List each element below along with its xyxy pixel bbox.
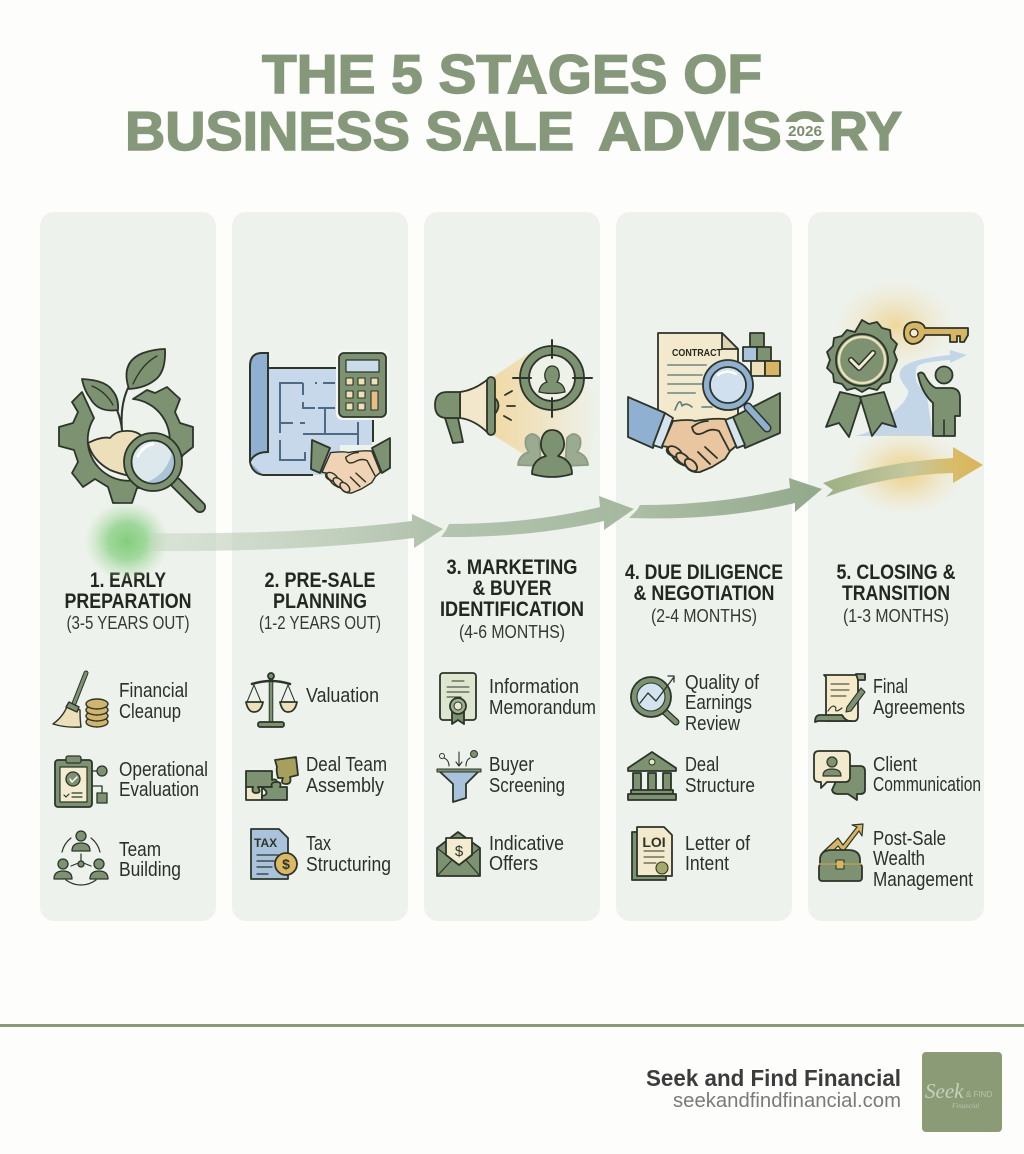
item: team building: Team — [119, 839, 161, 861]
item: final agreements: Agreements — [873, 697, 965, 719]
stage 5 heading: 5. CLOSING & — [836, 561, 956, 584]
icon: contract, blocks, magnifier and handshake — [628, 333, 780, 473]
item: quality of earnings review: Review — [685, 713, 740, 735]
item: letter of intent: Intent — [685, 853, 729, 875]
item: indicative offers — [489, 833, 564, 875]
title: RY — [829, 100, 902, 162]
icon: team building — [54, 831, 108, 885]
item: post-sale wealth management: Post-Sale — [873, 828, 946, 850]
glow: behind closing icons — [835, 280, 955, 370]
item: financial cleanup: Cleanup — [119, 701, 181, 723]
item: quality of earnings review — [685, 672, 759, 735]
stage 2 heading — [259, 569, 381, 633]
icon: treasure chest with growth arrow — [819, 824, 863, 881]
stage 3 heading: & BUYER — [472, 577, 552, 600]
icon: letter of intent: LOI — [642, 834, 666, 850]
item: quality of earnings review: Quality of — [685, 672, 759, 694]
stage 4 heading: 4. DUE DILIGENCE — [625, 561, 783, 584]
stage 5 heading: (1-3 MONTHS) — [843, 605, 949, 626]
stage 1 heading: (3-5 YEARS OUT) — [66, 612, 190, 633]
item: post-sale wealth management: Management — [873, 869, 973, 891]
item: buyer screening: Buyer — [489, 754, 534, 776]
footer: company name and website: Seek and Find Financial — [646, 1065, 901, 1091]
title: O — [782, 100, 828, 162]
item: financial cleanup: Financial — [119, 680, 188, 702]
icon: clipboard evaluation — [55, 756, 107, 807]
icon: blueprint, calculator and handshake — [250, 350, 390, 494]
stage 1 heading: 1. EARLY — [90, 569, 166, 592]
icon: tax document and coin: TAX — [254, 836, 277, 850]
icon: contract, blocks, magnifier and handshake: CONTRACT — [672, 348, 722, 359]
item: operational evaluation: Evaluation — [119, 779, 199, 801]
icon: tax document and coin — [251, 829, 297, 879]
handshake — [322, 451, 380, 494]
icon: earnings magnifier — [631, 676, 676, 722]
item: client communication: Communication — [873, 774, 981, 796]
item: operational evaluation — [119, 759, 208, 801]
icon: offer envelope: $ — [455, 843, 464, 860]
title — [125, 43, 902, 162]
item: deal structure: Deal — [685, 754, 719, 776]
item: quality of earnings review: Earnings — [685, 692, 752, 714]
item: team building: Building — [119, 859, 181, 881]
stage 2 heading: (1-2 YEARS OUT) — [259, 612, 381, 633]
item: deal team assembly — [306, 754, 387, 797]
icon: broom and coins — [53, 673, 108, 727]
handshake — [662, 419, 736, 473]
item: final agreements: Final — [873, 676, 908, 698]
stage 1 heading: PREPARATION — [64, 590, 192, 613]
item: financial cleanup — [119, 680, 188, 723]
item: team building — [119, 839, 181, 881]
panel: stage 2 pre-sale planning — [232, 212, 408, 921]
icon: tax document and coin: $ — [282, 856, 290, 872]
icon: chat bubbles with person — [814, 751, 865, 800]
item: tax structuring: Tax — [306, 833, 331, 855]
item: indicative offers: Offers — [489, 853, 538, 875]
glow: gold end point — [845, 428, 965, 516]
icon: gear with plant and magnifier — [59, 349, 200, 507]
footer: company name and website — [646, 1065, 901, 1112]
stage 5 heading — [836, 561, 956, 626]
arrow: stage 2 to 3 — [441, 496, 634, 537]
stage 4 heading: (2-4 MONTHS) — [651, 605, 757, 626]
item: final agreements — [873, 676, 965, 719]
item: valuation: Valuation — [306, 685, 379, 707]
item: letter of intent: Letter of — [685, 833, 750, 855]
stage 4 heading: & NEGOTIATION — [634, 582, 774, 605]
stage 5 heading: TRANSITION — [842, 582, 950, 605]
stage 3 heading: IDENTIFICATION — [440, 598, 584, 621]
icon: megaphone, target and buyers — [435, 340, 600, 477]
footer: logo: Financial — [951, 1102, 979, 1110]
panel: stage 1 early preparation — [40, 212, 216, 921]
item: information memorandum: Information — [489, 676, 579, 698]
title: THE 5 STAGES OF — [262, 43, 762, 105]
glow: green start point — [85, 501, 169, 581]
stage 2 heading: PLANNING — [273, 590, 367, 613]
title: ADVIS — [598, 100, 782, 162]
item: operational evaluation: Operational — [119, 759, 208, 781]
footer: logo — [922, 1052, 1002, 1132]
item: post-sale wealth management: Wealth — [873, 848, 925, 870]
footer: company name and website: seekandfindfinancial.com — [673, 1090, 901, 1112]
arrow: stage 4 to 5 — [823, 447, 983, 497]
panel: stage 4 due diligence and negotiation — [616, 212, 792, 921]
title: BUSINESS SALE — [125, 100, 574, 162]
item: deal structure — [685, 754, 755, 797]
item: client communication — [873, 754, 981, 796]
arrow: stage 1 to 2 — [150, 514, 443, 551]
item: buyer screening: Screening — [489, 775, 565, 797]
icon: offer envelope — [437, 832, 480, 876]
icon: letter of intent — [632, 827, 672, 880]
icon: certificate memorandum — [440, 673, 476, 724]
stage 4 heading — [625, 561, 783, 626]
item: deal team assembly: Assembly — [306, 775, 384, 797]
footer: logo: Seek — [925, 1079, 964, 1103]
stage 3 heading — [440, 556, 584, 642]
stage 3 heading: (4-6 MONTHS) — [459, 621, 565, 642]
arrow: stage 3 to 4 — [629, 478, 822, 518]
stage 3 heading: 3. MARKETING — [446, 556, 578, 579]
item: buyer screening — [489, 754, 565, 797]
panel: stage 3 marketing and buyer identification — [424, 212, 600, 921]
icon: puzzle pieces — [246, 757, 298, 800]
item: post-sale wealth management — [873, 828, 973, 891]
icon: signed scroll — [815, 674, 865, 722]
item: information memorandum — [489, 676, 596, 719]
item: tax structuring — [306, 833, 391, 876]
item: tax structuring: Structuring — [306, 854, 391, 876]
panel: stage 5 closing and transition — [808, 212, 984, 921]
icon: buyer funnel — [437, 750, 481, 802]
icon: rosette, key, road and person — [826, 320, 968, 437]
item: letter of intent — [685, 833, 750, 875]
icon: balance scale — [246, 673, 297, 727]
item: deal team assembly: Deal Team — [306, 754, 387, 776]
item: indicative offers: Indicative — [489, 833, 564, 855]
footer rule — [0, 1024, 1024, 1027]
item: client communication: Client — [873, 754, 917, 776]
icon: bank building — [628, 752, 676, 800]
item: deal structure: Structure — [685, 775, 755, 797]
title: 2026 — [788, 123, 822, 140]
item: information memorandum: Memorandum — [489, 697, 596, 719]
footer: logo: & FIND — [966, 1090, 992, 1099]
stage 1 heading — [64, 569, 192, 633]
stage 2 heading: 2. PRE-SALE — [264, 569, 376, 592]
